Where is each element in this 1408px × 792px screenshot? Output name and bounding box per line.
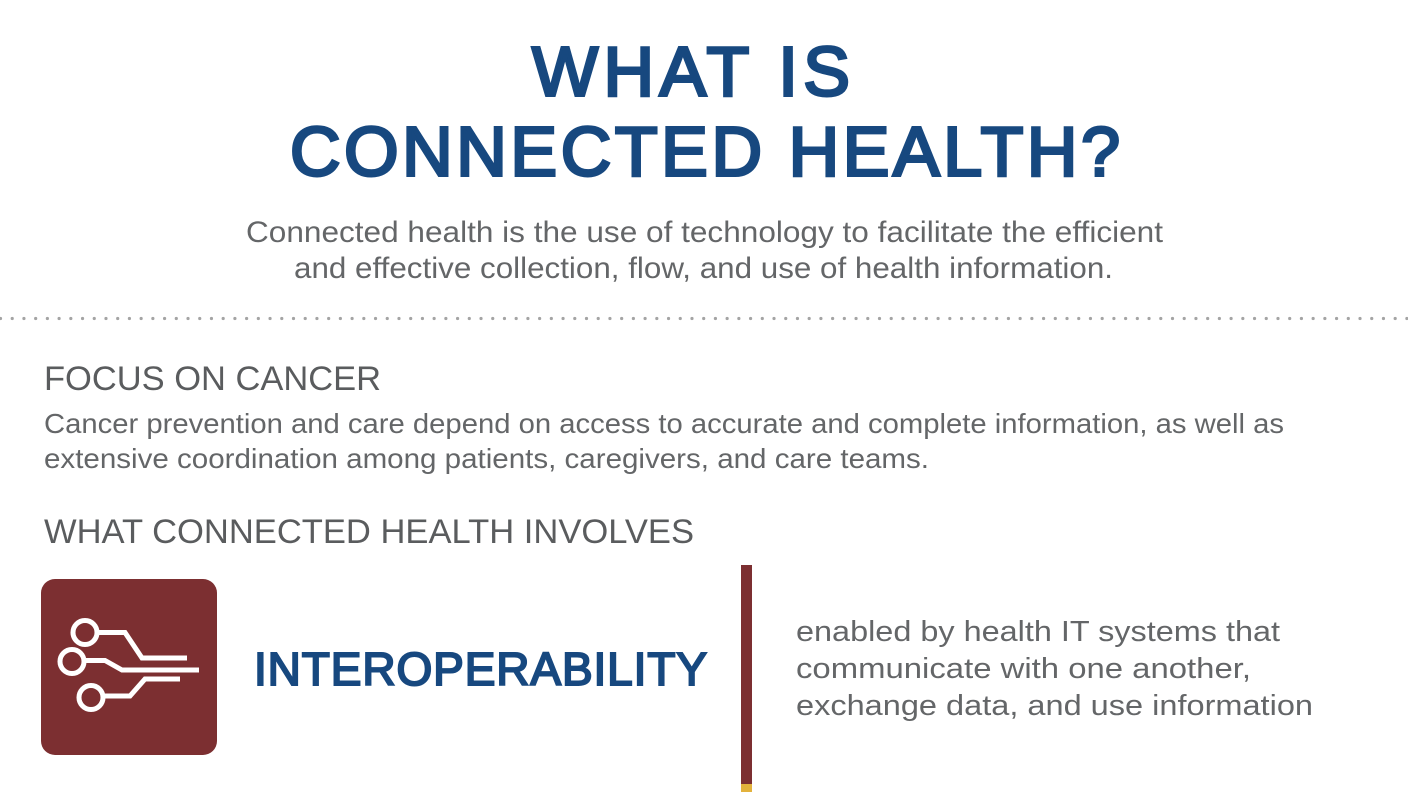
interoperability description: enabled by health IT systems that: [796, 616, 1280, 648]
interoperability description: communicate with one another,: [796, 653, 1251, 685]
title: [290, 32, 1120, 190]
icon: interoperability circuit: [41, 579, 217, 755]
vertical divider bar: [741, 565, 752, 792]
label: interoperability: INTEROPERABILITY: [254, 643, 707, 695]
heading: focus on cancer: FOCUS ON CANCER: [44, 360, 381, 398]
focus on cancer text: extensive coordination among patients, caregivers, and care teams.: [44, 443, 929, 474]
focus on cancer text: Cancer prevention and care depend on access to accurate and complete information, as well as: [44, 408, 1284, 439]
title: WHAT IS: [532, 32, 850, 110]
intro text: [246, 216, 1164, 285]
title: CONNECTED HEALTH?: [290, 112, 1120, 190]
heading: what connected health involves: WHAT CONNECTED HEALTH INVOLVES: [44, 513, 694, 551]
interoperability description: [796, 616, 1313, 722]
intro text: and effective collection, flow, and use of health information.: [294, 252, 1113, 285]
intro text: Connected health is the use of technology to facilitate the efficient: [246, 216, 1164, 249]
focus on cancer text: [44, 408, 1284, 474]
interoperability description: exchange data, and use information: [796, 690, 1313, 722]
